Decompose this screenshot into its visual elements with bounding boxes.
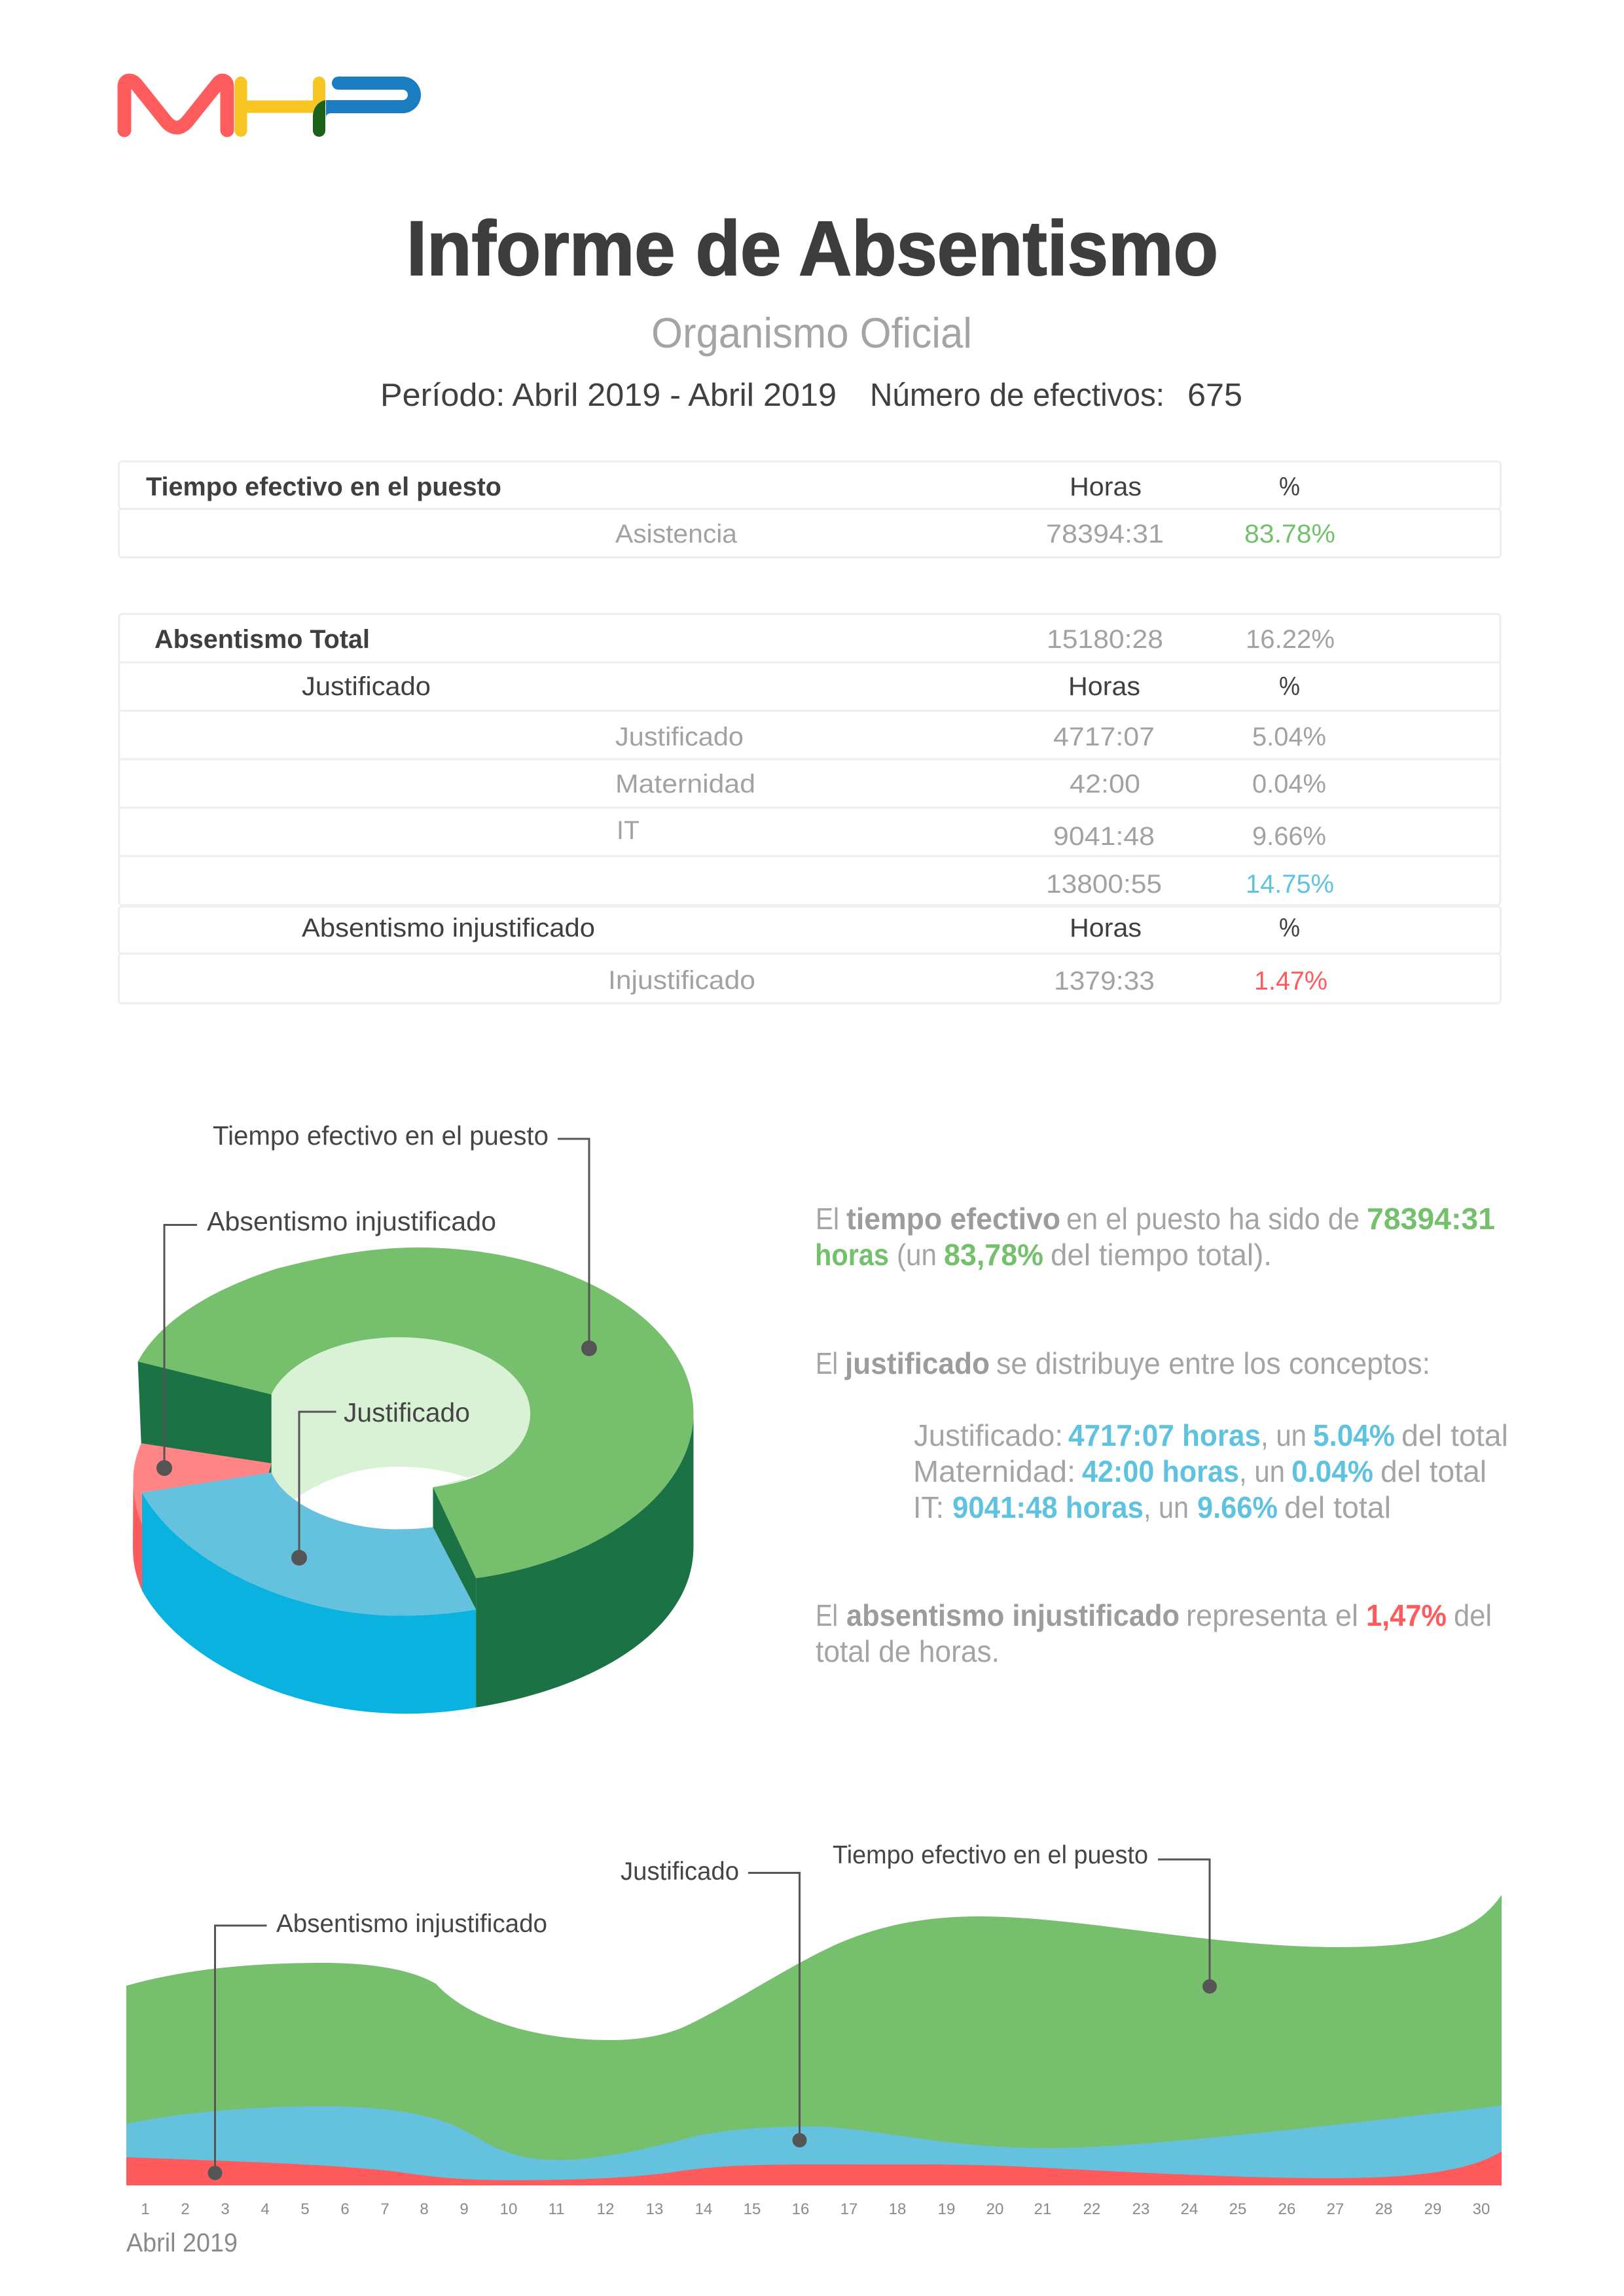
x axis day labels: 15 <box>744 2200 761 2218</box>
x axis day labels: 20 <box>986 2200 1003 2218</box>
text: justificado concepts: 4717:07 horas <box>1068 1418 1261 1452</box>
donut callout: justificado: Justificado <box>344 1397 470 1427</box>
text: justificado concepts: IT: <box>913 1490 944 1524</box>
period and headcount line: Número de efectivos: <box>870 378 1164 413</box>
text: justificado concepts: 9.66% <box>1197 1490 1278 1524</box>
x axis day labels: 22 <box>1083 2200 1100 2218</box>
x axis day labels: 25 <box>1229 2200 1246 2218</box>
logo: MHP <box>124 77 421 137</box>
table: tiempo efectivo: Tiempo efectivo en el puesto <box>146 473 501 501</box>
text: justificado concepts: , un <box>1261 1418 1307 1452</box>
table: absentismo total and justificado: Horas <box>1068 672 1140 701</box>
table: tiempo efectivo <box>119 461 1500 558</box>
donut callout: justificado <box>291 1397 470 1566</box>
table: absentismo injustificado <box>119 906 1500 1003</box>
x axis day labels: 17 <box>840 2200 857 2218</box>
text: justificado concepts: 9041:48 horas <box>952 1490 1144 1524</box>
table: tiempo efectivo: Asistencia <box>615 520 738 548</box>
x axis day labels: 7 <box>380 2200 389 2218</box>
table: absentismo total and justificado: Maternidad <box>615 770 755 798</box>
subtitle: Organismo Oficial <box>651 309 972 357</box>
x axis day labels: 14 <box>695 2200 712 2218</box>
table: absentismo total and justificado: 4717:07 <box>1053 723 1155 751</box>
text: absentismo injustificado: representa el <box>1186 1598 1358 1632</box>
text: tiempo efectivo <box>815 1202 1495 1272</box>
text: absentismo injustificado: total de horas. <box>816 1634 1000 1668</box>
x axis day labels: 10 <box>500 2200 517 2218</box>
text: tiempo efectivo: El <box>816 1202 839 1236</box>
donut callout: absentismo injustificado <box>156 1206 496 1476</box>
text: tiempo efectivo: en el puesto ha sido de <box>1066 1202 1360 1236</box>
text: justificado concepts: 0.04% <box>1291 1454 1373 1488</box>
table: absentismo total and justificado: 15180:28 <box>1047 625 1163 654</box>
text: justificado concepts: del total <box>1380 1454 1487 1488</box>
table: tiempo efectivo: 83.78% <box>1244 520 1335 548</box>
text: justificado concepts: 42:00 horas <box>1082 1454 1239 1488</box>
text: justificado concepts: , un <box>1239 1454 1285 1488</box>
text: tiempo efectivo: del tiempo total). <box>1051 1238 1272 1272</box>
x axis day labels: 12 <box>597 2200 614 2218</box>
table: absentismo total and justificado <box>119 614 1500 905</box>
text: justificado intro: El <box>816 1346 838 1380</box>
text: justificado concepts: , un <box>1144 1490 1189 1524</box>
x axis day labels: 3 <box>221 2200 230 2218</box>
table: absentismo total and justificado: Absentismo Total <box>154 625 370 654</box>
table: absentismo total and justificado: 13800:55 <box>1046 870 1162 899</box>
table: absentismo total and justificado: IT <box>617 816 640 845</box>
table: absentismo injustificado: Absentismo injustificado <box>302 914 595 942</box>
x axis day labels: 6 <box>340 2200 350 2218</box>
text: justificado concepts: del total <box>1284 1490 1391 1524</box>
table: absentismo injustificado: Injustificado <box>608 966 755 995</box>
area callout: justificado <box>621 1857 806 2147</box>
text: justificado intro <box>816 1346 1430 1380</box>
x axis day labels: 8 <box>420 2200 429 2218</box>
x axis day labels: 4 <box>261 2200 270 2218</box>
x axis day labels: 30 <box>1473 2200 1490 2218</box>
x axis day labels: 26 <box>1278 2200 1295 2218</box>
x axis day labels: 2 <box>181 2200 190 2218</box>
text: justificado concepts: 5.04% <box>1313 1418 1395 1452</box>
area callout: absentismo injustificado: Absentismo injustificado <box>276 1910 547 1938</box>
x axis day labels: 21 <box>1034 2200 1051 2218</box>
table: absentismo total and justificado: 9.66% <box>1252 822 1326 851</box>
period and headcount line <box>380 378 1242 413</box>
text: tiempo efectivo: 78394:31 <box>1367 1202 1495 1236</box>
text: absentismo injustificado: 1,47% <box>1366 1598 1447 1632</box>
table: absentismo total and justificado: 5.04% <box>1252 723 1326 751</box>
table: absentismo total and justificado: 0.04% <box>1252 770 1326 798</box>
table: absentismo total and justificado: 16.22% <box>1246 625 1335 654</box>
area callout: absentismo injustificado <box>208 1910 547 2180</box>
text: tiempo efectivo: 83,78% <box>944 1238 1043 1272</box>
text: justificado concepts <box>913 1418 1508 1524</box>
text: absentismo injustificado: del <box>1454 1598 1492 1632</box>
x axis day labels: 9 <box>460 2200 469 2218</box>
x axis day labels: 19 <box>938 2200 955 2218</box>
donut callout: absentismo injustificado: Absentismo injustificado <box>207 1206 496 1236</box>
text: tiempo efectivo: tiempo efectivo <box>846 1202 1060 1236</box>
x axis day labels: 16 <box>792 2200 809 2218</box>
table: absentismo total and justificado: 42:00 <box>1070 770 1140 798</box>
3D donut chart <box>133 1247 693 1713</box>
text: justificado concepts: Maternidad: <box>913 1454 1075 1488</box>
x axis day labels: 18 <box>889 2200 906 2218</box>
stacked area chart <box>126 1895 1502 2185</box>
title: Informe de Absentismo <box>406 206 1218 292</box>
x axis day labels: 28 <box>1375 2200 1392 2218</box>
text: tiempo efectivo: (un <box>897 1238 937 1272</box>
period and headcount line: 675 <box>1187 378 1242 413</box>
table: absentismo total and justificado: % <box>1279 672 1300 701</box>
donut callout: tiempo efectivo <box>213 1121 597 1356</box>
table: absentismo injustificado: Horas <box>1070 914 1142 942</box>
text: justificado concepts: del total <box>1401 1418 1508 1452</box>
table: absentismo total and justificado: Justificado <box>615 723 744 751</box>
text: absentismo injustificado <box>816 1598 1492 1668</box>
text: tiempo efectivo: horas <box>815 1238 889 1272</box>
x axis day labels: 23 <box>1132 2200 1149 2218</box>
period and headcount line: Período: Abril 2019 - Abril 2019 <box>380 378 837 413</box>
table: tiempo efectivo: Horas <box>1070 473 1142 501</box>
donut callout: tiempo efectivo: Tiempo efectivo en el puesto <box>213 1121 549 1151</box>
table: absentismo total and justificado: Justificado <box>302 672 431 701</box>
table: absentismo total and justificado: 9041:48 <box>1053 822 1155 851</box>
x axis day labels: 13 <box>646 2200 663 2218</box>
table: absentismo injustificado: 1379:33 <box>1054 967 1155 996</box>
table: tiempo efectivo: % <box>1279 473 1300 501</box>
x axis month label: Abril 2019 <box>126 2229 238 2257</box>
text: justificado concepts: Justificado: <box>914 1418 1063 1452</box>
area callout: tiempo efectivo <box>833 1841 1217 1994</box>
text: justificado intro: se distribuye entre los conceptos: <box>996 1346 1430 1380</box>
x axis day labels: 5 <box>300 2200 310 2218</box>
table: absentismo injustificado: % <box>1279 914 1300 942</box>
area callout: tiempo efectivo: Tiempo efectivo en el puesto <box>833 1841 1148 1869</box>
table: tiempo efectivo: 78394:31 <box>1046 520 1164 548</box>
text: justificado intro: justificado <box>844 1346 990 1380</box>
table: absentismo total and justificado: 14.75% <box>1246 870 1334 899</box>
text: absentismo injustificado: absentismo injustificado <box>846 1598 1180 1632</box>
x axis day labels: 1 <box>141 2200 150 2218</box>
text: absentismo injustificado: El <box>816 1598 838 1632</box>
x axis day labels: 11 <box>549 2200 564 2218</box>
x axis day labels: 24 <box>1181 2200 1198 2218</box>
x axis day labels: 27 <box>1327 2200 1344 2218</box>
table: absentismo injustificado: 1.47% <box>1254 967 1327 996</box>
x axis day labels <box>141 2200 1490 2218</box>
area callout: justificado: Justificado <box>621 1857 739 1886</box>
x axis day labels: 29 <box>1424 2200 1441 2218</box>
